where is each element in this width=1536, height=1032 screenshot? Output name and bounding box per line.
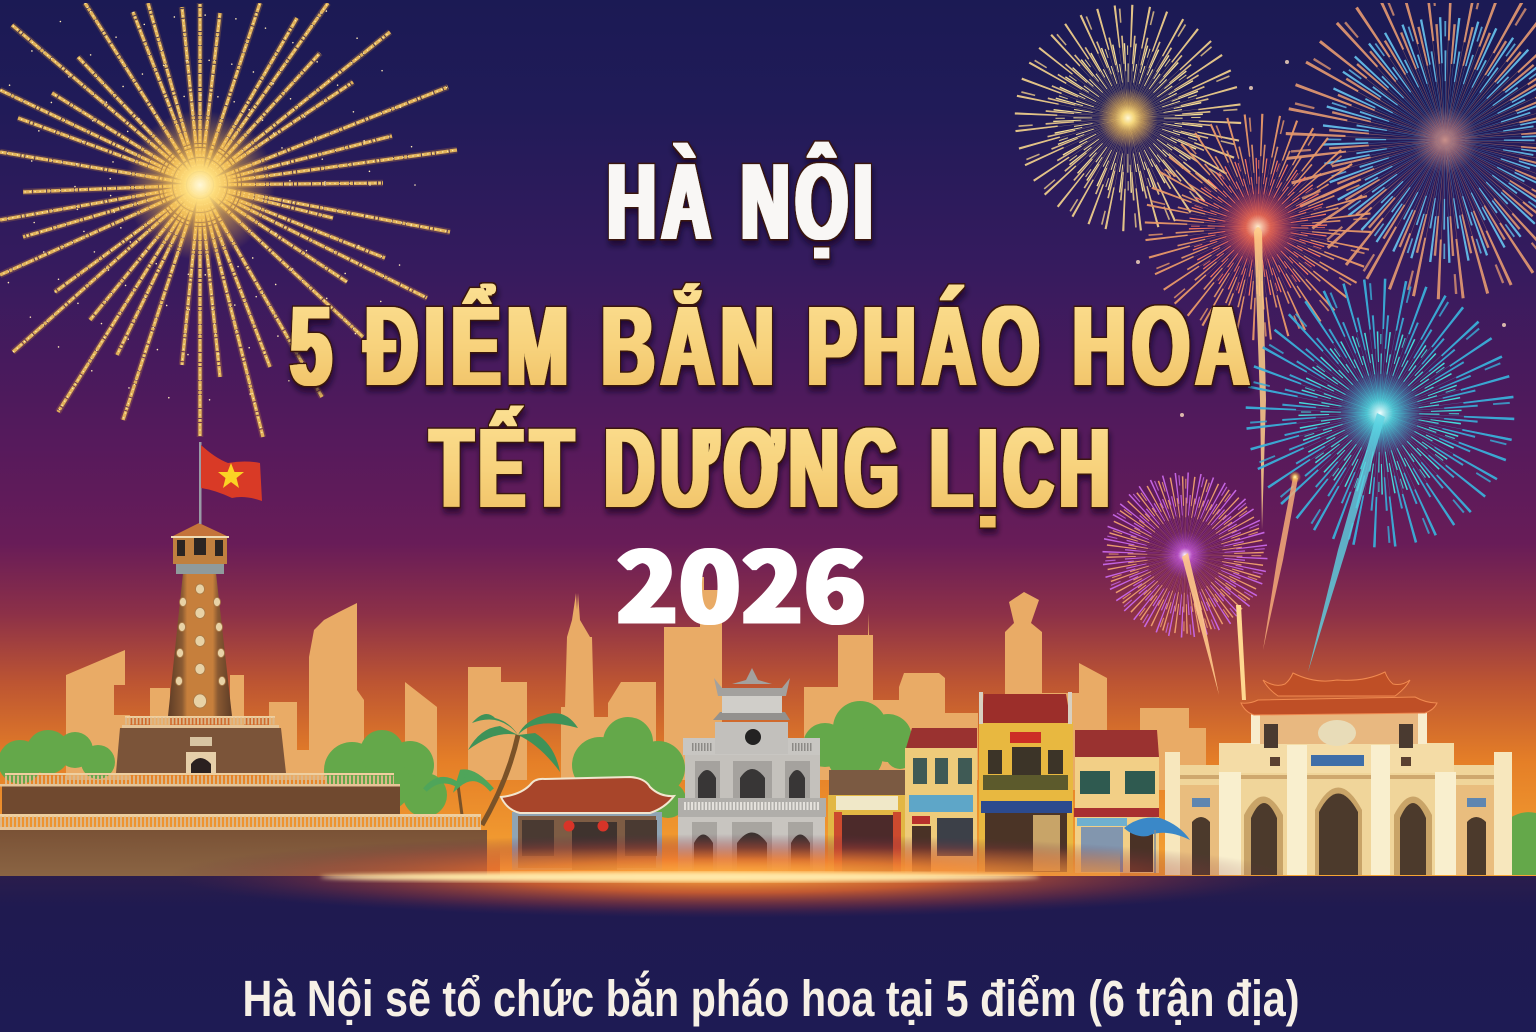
title line: Tết Dương lịch: TẾT DƯƠNG LỊCH xyxy=(430,405,1116,531)
firework: small gold burst xyxy=(1025,15,1231,221)
city skyline silhouettes xyxy=(66,577,1206,790)
shophouse 1 xyxy=(828,770,906,873)
citadel upper railing xyxy=(0,773,400,786)
shophouse 4 xyxy=(1074,730,1159,873)
firework: large gold burst xyxy=(0,0,457,437)
Doan Mon gate xyxy=(1165,672,1512,875)
citadel base tier xyxy=(0,830,487,876)
firework trails xyxy=(1236,471,1301,700)
flag pole xyxy=(199,442,202,524)
firework: purple burst with rising trail xyxy=(1108,478,1262,695)
gate side end towers xyxy=(1165,752,1512,875)
gate arches xyxy=(1192,788,1486,875)
fort railing xyxy=(122,716,279,728)
firework: cyan burst with rising trail xyxy=(1258,291,1502,672)
gate upper storey xyxy=(1219,712,1454,773)
tower shaft xyxy=(168,573,232,716)
firework: multicolour burst top right xyxy=(1301,0,1536,284)
top edge line xyxy=(0,0,1536,3)
shrub far right xyxy=(1510,812,1536,875)
tree behind temple xyxy=(572,717,686,824)
Hanoi flag tower citadel xyxy=(0,442,487,876)
tree behind citadel xyxy=(324,730,447,817)
shophouse 2 xyxy=(905,728,977,873)
temple pavilion xyxy=(501,777,674,870)
gate upper roof xyxy=(1263,672,1410,696)
subtitle: Hà Nội sẽ tổ chức bắn pháo hoa tại 5 điểm (6 trận địa) xyxy=(242,969,1300,1027)
citadel middle tier xyxy=(2,786,400,814)
fort block and gate xyxy=(116,728,286,773)
tree behind shophouses xyxy=(803,701,914,783)
turtle tower balustrades xyxy=(678,738,826,817)
gate pillars xyxy=(1219,745,1456,875)
firework: red burst with rising trail xyxy=(1155,124,1361,530)
palm trees xyxy=(425,713,578,825)
blue street umbrella xyxy=(1124,817,1190,873)
turtle tower ground floor xyxy=(678,815,825,872)
tree left of citadel xyxy=(0,730,115,784)
sparkles in the sky xyxy=(1136,60,1506,417)
Turtle Tower xyxy=(678,668,826,872)
turtle tower upper storey and crown xyxy=(713,668,790,754)
main title xyxy=(290,141,1256,531)
gate lower roof xyxy=(1241,697,1437,715)
street light glow on horizon xyxy=(170,834,1290,918)
tower lookout xyxy=(171,523,229,574)
citadel lower railing xyxy=(0,814,481,830)
Vietnamese flag xyxy=(201,445,262,501)
old quarter shophouses xyxy=(828,692,1159,873)
gate main wall xyxy=(1166,765,1512,875)
turtle tower middle floor xyxy=(685,755,820,800)
ground below skyline xyxy=(0,876,1536,1032)
shophouse 3 xyxy=(979,692,1073,873)
year 2026: 2026 xyxy=(616,507,866,653)
title line: Hà Nội: HÀ NỘI xyxy=(608,141,878,263)
trees xyxy=(0,701,1536,875)
